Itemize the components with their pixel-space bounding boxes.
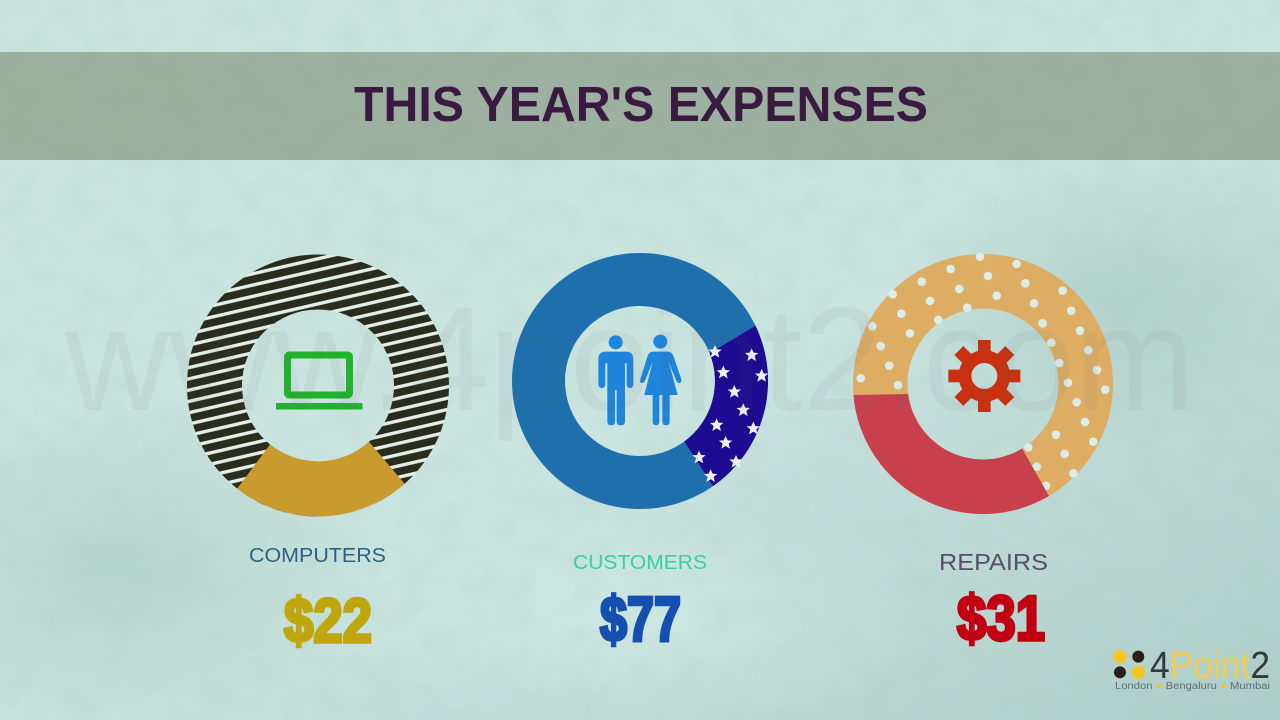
stars pattern	[692, 345, 768, 482]
logo cities: London ● Bengaluru ● Mumbai	[1115, 680, 1270, 692]
value: repairs: $31	[957, 584, 1045, 654]
icon: laptop	[276, 355, 362, 410]
ring: customers share	[538, 280, 742, 482]
ring: striped remainder	[214, 282, 422, 489]
donut chart: customers	[538, 280, 768, 486]
label: repairs: REPAIRS	[939, 549, 1048, 575]
value: customers: $77	[600, 585, 681, 655]
value: computers: $22	[284, 587, 372, 656]
logo: 4Point2	[1113, 645, 1270, 692]
icon: man and woman	[598, 335, 681, 425]
polka dots	[856, 252, 1110, 490]
header band	[0, 52, 1280, 160]
icon: gear	[948, 340, 1020, 412]
segment: starred remainder	[684, 326, 768, 486]
watermark: www.4point2.com	[64, 277, 1195, 442]
label: computers: COMPUTERS	[249, 545, 386, 567]
ring: dotted remainder	[880, 281, 1086, 487]
logo dots	[1113, 650, 1145, 679]
title: THIS YEAR'S EXPENSES	[354, 78, 928, 132]
segment: computers share	[237, 442, 405, 516]
donut chart: repairs	[853, 252, 1110, 514]
label: customers: CUSTOMERS	[573, 552, 707, 574]
logo wordmark: 4Point2	[1150, 645, 1270, 687]
donut chart: computers	[214, 282, 422, 516]
segment: repairs share	[853, 394, 1049, 514]
